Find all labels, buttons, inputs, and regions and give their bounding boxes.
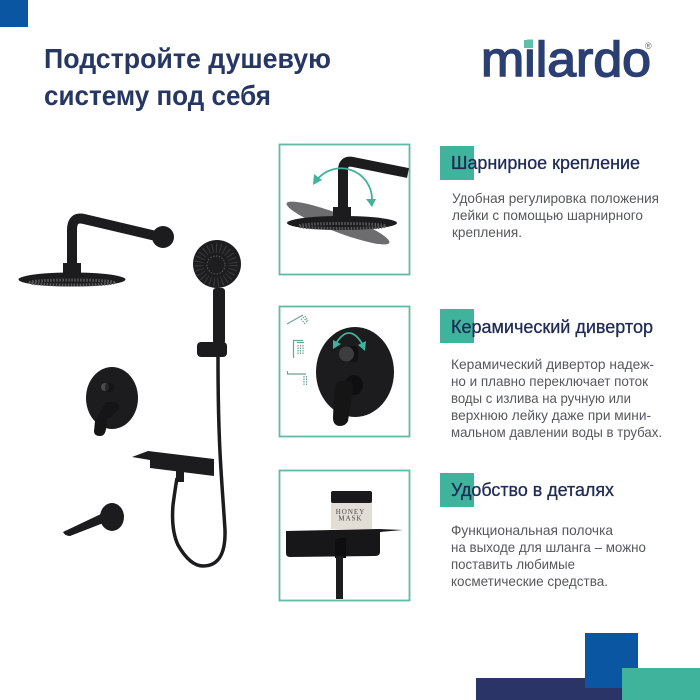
title: Подстройте душевую: [44, 43, 331, 74]
panel: ceramic diverter: [280, 306, 410, 436]
text: diverter: но и плавно переключает поток: [451, 373, 649, 389]
corner square: [0, 0, 28, 27]
jar: [331, 491, 372, 529]
heading: diverter: Керамический дивертор: [451, 317, 653, 337]
hose: [173, 357, 225, 566]
mixer plate: [316, 327, 394, 417]
text: diverter: верхнюю лейку даже при мини-: [451, 407, 651, 423]
logo: milardo: milardo: [481, 33, 651, 87]
diverter mixer: [86, 367, 138, 436]
text: details: Функциональная полочка: [451, 522, 613, 538]
lever: [333, 375, 363, 426]
tilted shower head: [283, 195, 393, 251]
shower arm and head: [287, 162, 408, 230]
title: систему под себя: [44, 80, 271, 111]
rotation arrow: [313, 168, 376, 207]
text: details: поставить любимые: [451, 556, 575, 572]
text: details: [451, 522, 646, 589]
shelf: [286, 529, 403, 558]
title: [44, 43, 331, 111]
heading: details: [440, 473, 614, 507]
text: details: на выходе для шланга – можно: [451, 539, 646, 555]
icon: overhead shower: [287, 315, 308, 324]
rotation arrow: [333, 333, 366, 351]
hose: [336, 556, 343, 599]
text: diverter: мальном давлении воды в трубах.: [451, 424, 662, 440]
text: swivel: лейки с помощью шарнирного: [452, 207, 643, 223]
jar: HONEY: [336, 508, 365, 516]
icon: hand shower: [294, 340, 304, 358]
overhead shower: [18, 218, 174, 286]
text: swivel: Удобная регулировка положения: [452, 190, 659, 206]
product illustration: full shower set: [18, 218, 241, 566]
footer colour blocks: [476, 633, 700, 700]
panel: swivel joint: [280, 144, 410, 274]
spout: [63, 503, 124, 536]
wall shelf: [132, 451, 214, 482]
heading: swivel: [440, 146, 640, 180]
logo: milardo: ®: [645, 41, 652, 51]
hand shower: [193, 240, 241, 357]
text: swivel: крепления.: [452, 224, 522, 240]
panel: shelf detail: [280, 470, 410, 600]
heading: diverter: [440, 309, 653, 343]
icon: spout: [288, 371, 306, 385]
text: diverter: Керамический дивертор надеж-: [451, 356, 654, 372]
text: details: косметические средства.: [451, 573, 608, 589]
text: diverter: воды с излива на ручную или: [451, 390, 631, 406]
jar: MASK: [338, 514, 363, 522]
text: diverter: [451, 356, 662, 440]
heading: details: Удобство в деталях: [451, 480, 614, 500]
knob: [339, 346, 358, 362]
text: swivel: [452, 190, 659, 240]
heading: swivel: Шарнирное крепление: [451, 153, 640, 173]
